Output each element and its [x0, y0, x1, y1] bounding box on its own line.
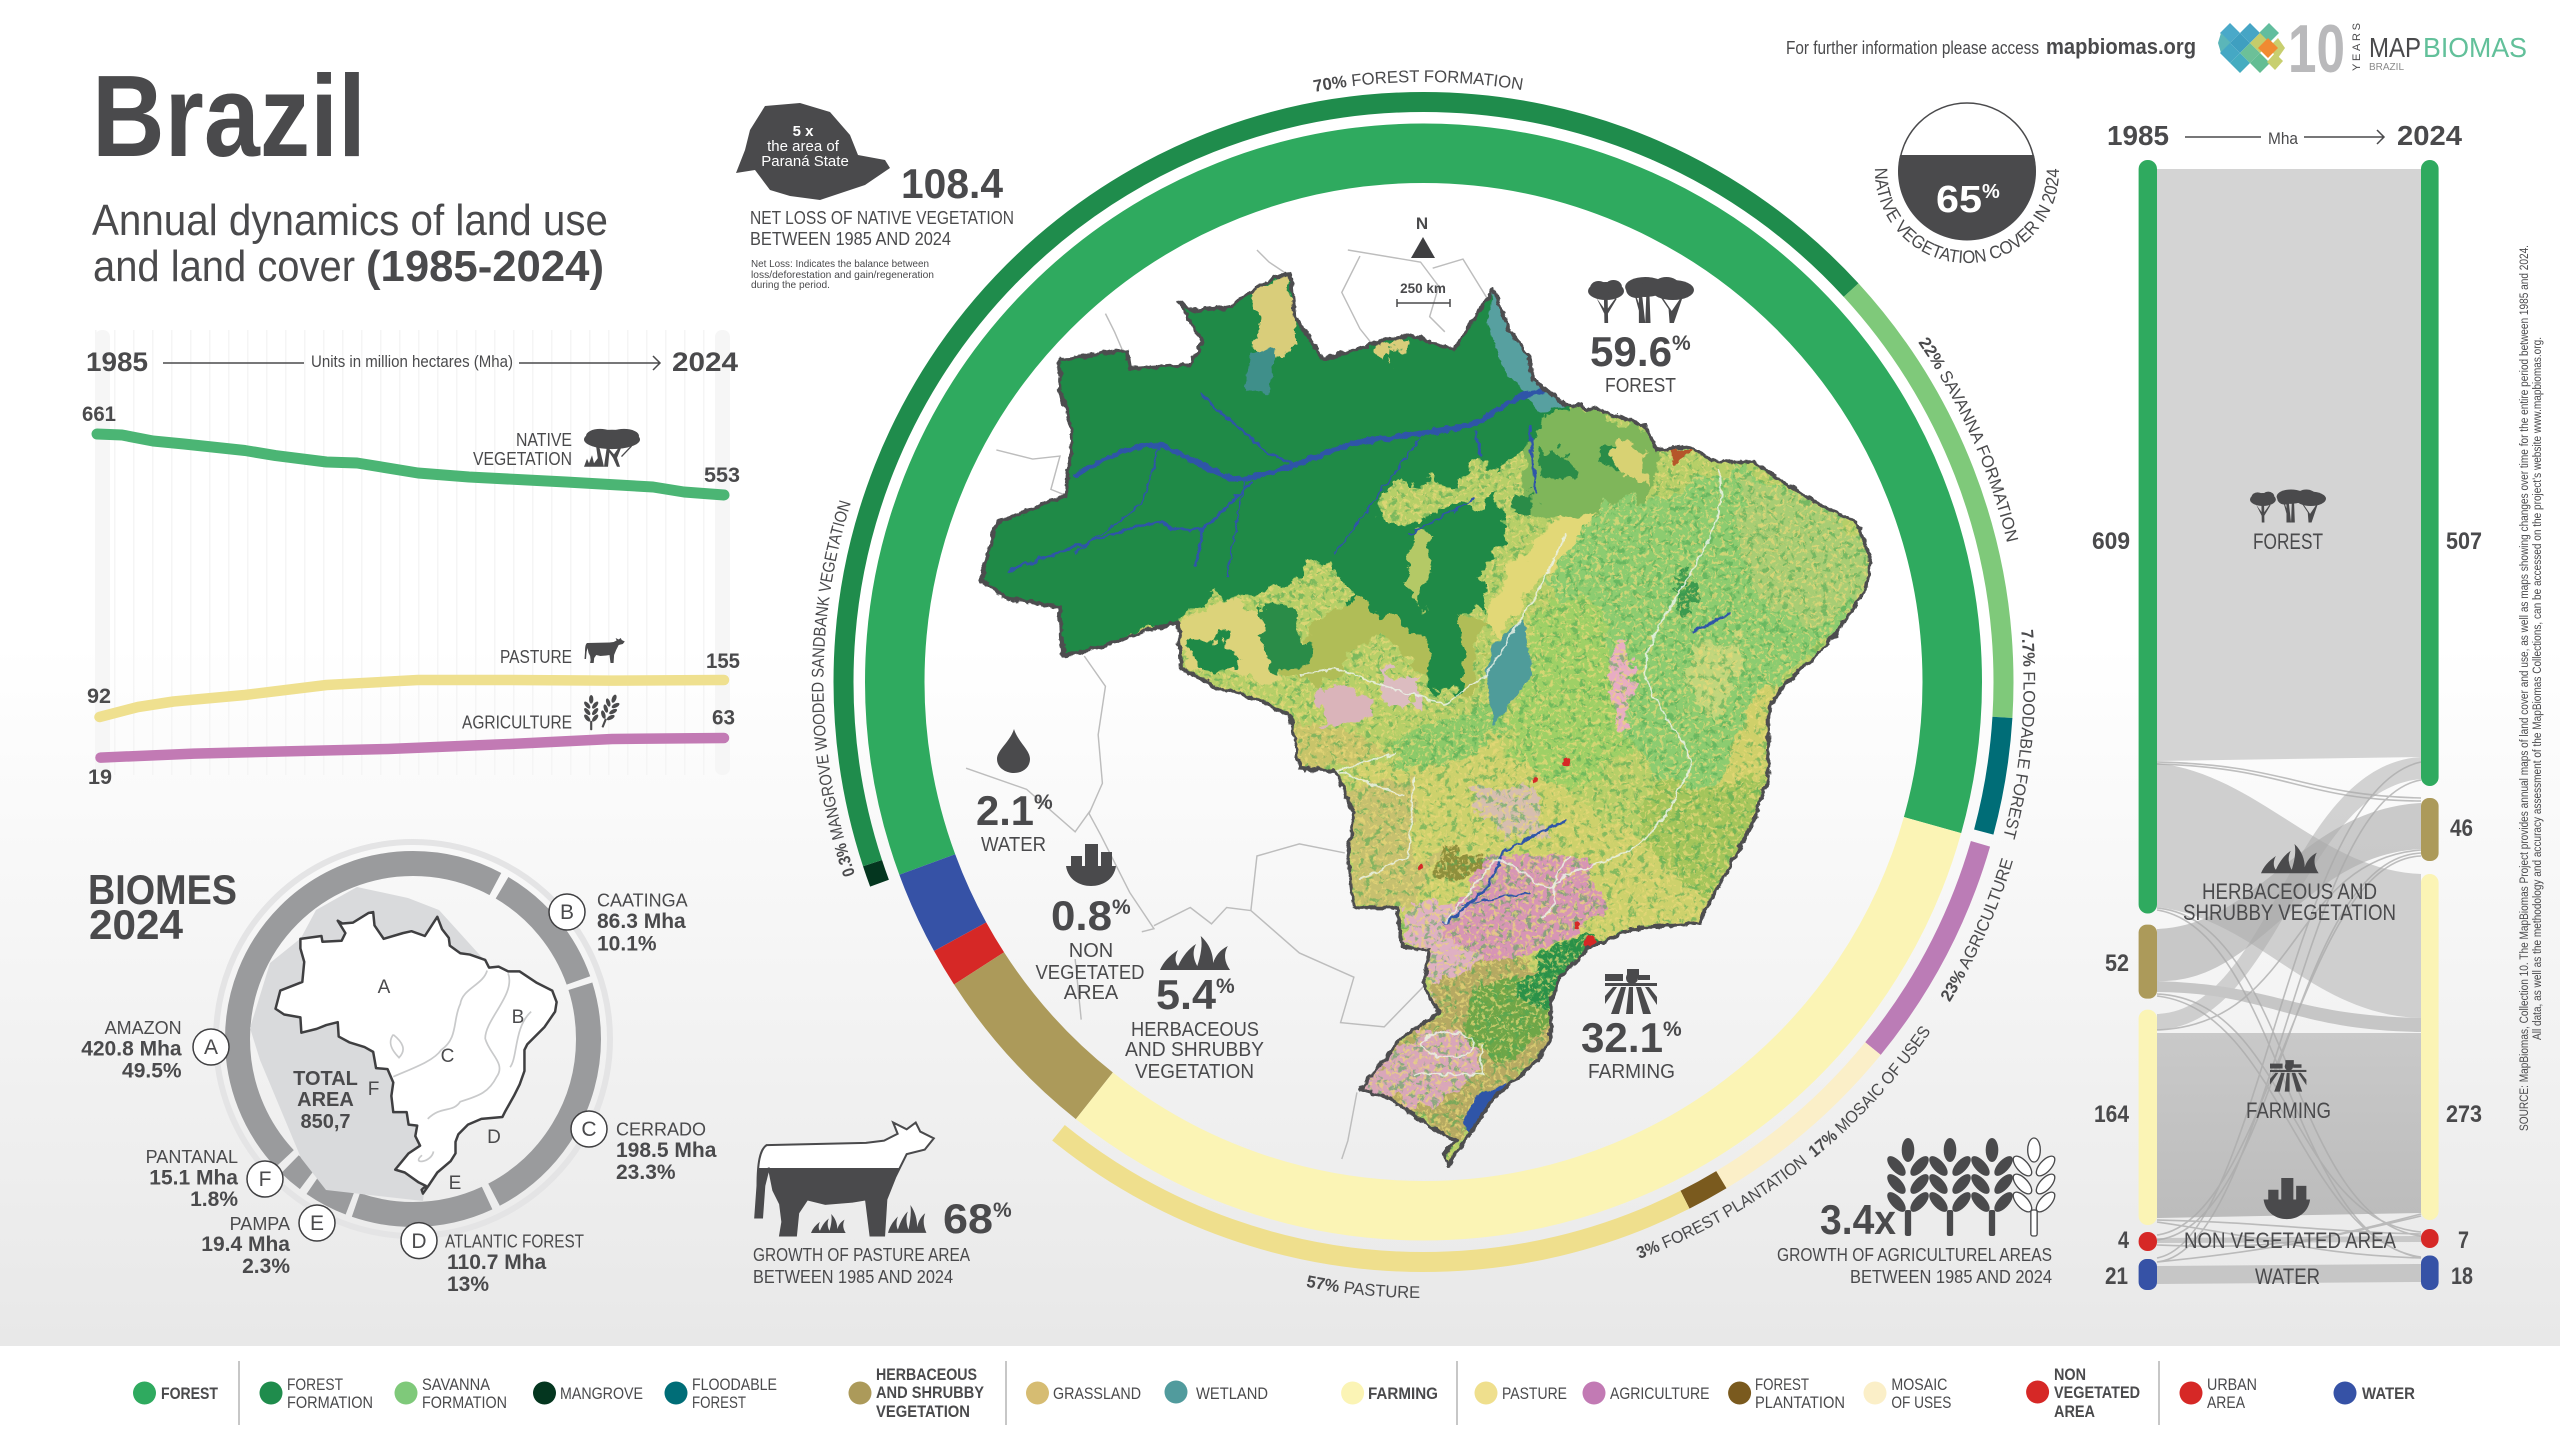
source note: SOURCE: MapBiomas, Collection 10. The MapBiomas Project provides annual maps of land cover and use, as well as maps showing changes over time for the entire period between 1985 and 2024.: [2519, 245, 2531, 1131]
total area: [293, 1068, 358, 1133]
chart axis header: 2024: [672, 347, 738, 377]
sankey header: 2024: [2397, 120, 2462, 151]
stat: herbaceous: 5.4: [1156, 971, 1217, 1018]
legend: mangrove: [533, 1382, 643, 1404]
biome label: Pampa: 19.4 Mha: [201, 1233, 290, 1256]
sankey values: 507: [2446, 528, 2482, 555]
ring labels: 70% FOREST FORMATION: [1313, 70, 1523, 92]
biome label: Amazon: AMAZON: [105, 1018, 182, 1038]
icon: water drop: [997, 729, 1030, 773]
net loss note: Net Loss: Indicates the balance between: [751, 259, 929, 270]
biome label: Cerrado: 23.3%: [616, 1161, 676, 1184]
gauge: native vegetation 65%: [1874, 102, 2060, 264]
biomes heading: BIOMES: [88, 866, 237, 913]
ring labels: 3% FOREST PLANTATION: [1636, 1154, 1808, 1258]
panel: annual line chart: [82, 330, 740, 789]
map letters: B: [512, 1007, 524, 1028]
biome label: Pantanal: 15.1 Mha: [149, 1166, 238, 1190]
icon: wheat stalks: [1884, 1138, 2058, 1236]
logo: MapBiomas 10 years: MAP: [2369, 32, 2421, 63]
biome marker letters: D: [411, 1230, 427, 1253]
biome marker letters: E: [310, 1212, 324, 1235]
sankey labels: FARMING: [2246, 1098, 2331, 1123]
net loss note: during the period.: [751, 280, 830, 291]
legend: mangrove: MANGROVE: [560, 1385, 643, 1403]
legend: floodable forest: FLOODABLE: [692, 1376, 777, 1394]
callout: pasture growth: GROWTH OF PASTURE AREA: [753, 1245, 970, 1265]
stat: water: %: [1034, 791, 1053, 814]
chart line labels: [462, 430, 572, 732]
biome marker letters: C: [581, 1118, 597, 1141]
legend: water: WATER: [2362, 1385, 2415, 1403]
callout: pasture growth: [753, 1123, 1012, 1287]
biome label: Cerrado: CERRADO: [616, 1120, 706, 1140]
biomes heading: 2024: [89, 901, 184, 948]
icon: north arrow: [1411, 214, 1435, 258]
stat: water: 2.1: [976, 787, 1034, 834]
sankey header: [2107, 120, 2462, 151]
chart line labels: AGRICULTURE: [462, 712, 572, 732]
sankey header: Mha: [2268, 129, 2298, 148]
legend: non vegetated area: NON: [2054, 1366, 2086, 1384]
stat: herbaceous: %: [1216, 975, 1235, 998]
legend: forest plantation: [1728, 1376, 1845, 1412]
stat: non vegetated area: [1036, 844, 1144, 1004]
chart values: 63: [712, 706, 735, 730]
biomes heading: [88, 866, 237, 948]
gauge: native vegetation 65%: NATIVE VEGETATION COVER IN 2024: [1874, 168, 2060, 264]
callout: agriculture growth: GROWTH OF AGRICULTUREL AREAS: [1777, 1245, 2052, 1265]
biome markers: [193, 894, 607, 1259]
biome label: Atlantic Forest: 110.7 Mha: [447, 1251, 547, 1274]
stat: non vegetated area: AREA: [1064, 982, 1119, 1004]
Parana text: 5 x: [793, 123, 814, 140]
gauge: native vegetation 65%: %: [1982, 181, 2000, 203]
stat: farming: 32.1: [1581, 1014, 1663, 1061]
Parana text: the area of: [767, 138, 840, 155]
legend: farming: FARMING: [1368, 1385, 1438, 1403]
net loss description: [750, 208, 1014, 249]
sankey values: 7: [2458, 1227, 2469, 1254]
legend: wetland: [1164, 1380, 1268, 1404]
subtitle: and land cover: [93, 242, 355, 291]
subtitle: Annual dynamics of land use: [92, 196, 608, 245]
logo: MapBiomas 10 years: [2218, 11, 2527, 87]
biome label: Atlantic Forest: 13%: [447, 1273, 489, 1296]
gauge: native vegetation 65%: 65: [1936, 179, 1982, 221]
sankey values: 273: [2446, 1101, 2482, 1128]
Parana text: Paraná State: [761, 153, 849, 170]
biome label: Pantanal: [146, 1147, 238, 1211]
sankey nodes 2024: [2421, 160, 2439, 1290]
chart line labels: NATIVE: [516, 430, 572, 450]
legend: forest: [133, 1382, 218, 1404]
net loss number: 108.4: [901, 160, 1004, 207]
sankey icons: [2250, 489, 2326, 1219]
biome label: Caatinga: CAATINGA: [597, 891, 688, 911]
ring labels: 22% SAVANNA FORMATION: [1918, 338, 2018, 542]
biome label: Pampa: [201, 1214, 290, 1278]
biome ring: [216, 842, 610, 1236]
logo: MapBiomas 10 years: BIOMAS: [2423, 32, 2527, 63]
chart axis header: [86, 347, 738, 377]
title: Brazil: [92, 51, 366, 181]
sankey values: 52: [2105, 950, 2129, 977]
stat: farming: [1581, 969, 1682, 1083]
stat: non vegetated area: VEGETATED: [1036, 962, 1144, 984]
legend: grassland: GRASSLAND: [1053, 1385, 1141, 1403]
icon: farm: [1605, 969, 1657, 1014]
biome marker letters: F: [259, 1168, 271, 1191]
legend: herbaceous and shrubby: [848, 1366, 984, 1421]
biome label: Atlantic Forest: [445, 1232, 584, 1296]
sankey labels: [2183, 529, 2396, 1289]
icon: cow: [585, 638, 625, 663]
total area: TOTAL: [293, 1068, 358, 1090]
map letters: C: [441, 1046, 454, 1067]
callout: pasture growth: %: [993, 1199, 1012, 1222]
net loss note: [751, 259, 934, 291]
legend: forest: FOREST: [161, 1385, 218, 1403]
chart line labels: VEGETATION: [473, 449, 572, 469]
chart values: 553: [704, 464, 740, 487]
biome label: Amazon: 49.5%: [122, 1060, 182, 1082]
subtitle: [92, 196, 608, 291]
icon: wheat: [583, 692, 623, 731]
biome label: Cerrado: 198.5 Mha: [616, 1139, 717, 1162]
sankey values: 46: [2450, 815, 2473, 842]
ring labels: 23% AGRICULTURE: [1941, 858, 2013, 1002]
callout: net loss: [736, 103, 1014, 291]
line: agriculture: [100, 738, 724, 758]
legend: mosaic of uses: [1864, 1376, 1951, 1412]
legend: herbaceous and shrubby: VEGETATION: [876, 1403, 970, 1421]
icon: grass tufts: [811, 1205, 926, 1233]
biome label: Atlantic Forest: ATLANTIC FOREST: [445, 1232, 584, 1252]
legend: wetland: WETLAND: [1196, 1385, 1268, 1403]
ring labels: [812, 70, 2036, 1298]
ring labels: 7.7% FLOODABLE FOREST: [2004, 630, 2036, 840]
biome marker letters: A: [204, 1036, 218, 1059]
legend: mosaic of uses: OF USES: [1891, 1394, 1951, 1412]
callout: pasture growth: 68: [943, 1195, 993, 1242]
sankey header: 1985: [2107, 120, 2169, 151]
legend: forest plantation: PLANTATION: [1755, 1394, 1845, 1412]
legend: grassland: [1026, 1382, 1141, 1404]
sankey values: 21: [2105, 1263, 2128, 1290]
legend: urban area: [2180, 1376, 2257, 1412]
stat: farming: %: [1663, 1018, 1682, 1041]
map scale bar: 250 km: [1400, 281, 1446, 296]
ring labels: 17% MOSAIC OF USES: [1809, 1026, 1930, 1158]
biome label: Amazon: [81, 1018, 182, 1082]
stat: farming: FARMING: [1588, 1061, 1675, 1083]
legend: savanna formation: FORMATION: [422, 1394, 507, 1412]
chart axis header: 1985: [86, 347, 148, 377]
stat: forest: [1588, 277, 1694, 397]
sankey nodes 1985: [2139, 160, 2157, 1290]
ring labels: 57% PASTURE: [1306, 1275, 1420, 1298]
legend: agriculture: [1582, 1382, 1710, 1404]
legend: farming: [1341, 1382, 1438, 1404]
header: further information: For further information please access: [1786, 38, 2039, 58]
panel: biomes 2024: [81, 842, 717, 1296]
icon: native tree: [584, 429, 640, 467]
chart values: 661: [82, 403, 116, 426]
legend: forest formation: [260, 1376, 373, 1412]
map letters: [368, 977, 524, 1194]
logo: MapBiomas 10 years: 10: [2288, 11, 2345, 87]
line: pasture: [100, 680, 724, 717]
map letters: E: [449, 1173, 461, 1194]
stat: forest: 59.6: [1590, 328, 1672, 375]
legend dividers: [239, 1361, 2159, 1425]
legend: non vegetated area: AREA: [2054, 1403, 2095, 1421]
map scale bar: [1397, 281, 1450, 307]
logo: MapBiomas 10 years: BRAZIL: [2369, 62, 2404, 73]
line: native vegetation: [97, 434, 724, 495]
legend: herbaceous and shrubby: AND SHRUBBY: [876, 1384, 984, 1402]
legend: savanna formation: SAVANNA: [422, 1376, 490, 1394]
legend: non vegetated area: [2026, 1366, 2140, 1421]
legend: savanna formation: [394, 1376, 507, 1412]
legend: floodable forest: [664, 1376, 777, 1412]
callout: pasture growth: BETWEEN 1985 AND 2024: [753, 1267, 953, 1287]
legend: mosaic of uses: MOSAIC: [1891, 1376, 1947, 1394]
sankey values: [2092, 528, 2482, 1290]
legend: herbaceous and shrubby: HERBACEOUS: [876, 1366, 977, 1384]
header: further information: mapbiomas.org: [2046, 34, 2196, 59]
biome label: Pantanal: PANTANAL: [146, 1147, 238, 1167]
sankey values: 609: [2092, 528, 2130, 555]
Parana text: [761, 123, 849, 170]
icon: buildings: [1066, 844, 1116, 886]
total area: AREA: [297, 1089, 354, 1111]
legend: agriculture: AGRICULTURE: [1610, 1385, 1710, 1403]
sankey labels: SHRUBBY VEGETATION: [2183, 900, 2396, 925]
biome label: Caatinga: 10.1%: [597, 932, 657, 956]
sankey values: 4: [2118, 1227, 2130, 1254]
biome marker letters: B: [560, 901, 574, 924]
sankey labels: FOREST: [2253, 529, 2323, 554]
stat: forest: %: [1672, 332, 1691, 355]
stat: herbaceous: VEGETATION: [1135, 1061, 1254, 1083]
outer ring: sub-classes: [844, 102, 2004, 1262]
sankey flows: [2157, 169, 2421, 1284]
legend: urban area: AREA: [2207, 1394, 2245, 1412]
ring labels: 0.3% MANGROVE WOODED SANDBANK VEGETATION: [812, 500, 854, 876]
header: further information: [1786, 34, 2196, 59]
source note: All data, as well as the methodology and accuracy assessment of the MapBiomas Collections, can be accessed on the project's website www.mapbiomas.org.: [2532, 337, 2544, 1040]
legend: urban area: URBAN: [2207, 1376, 2257, 1394]
stat: non vegetated area: %: [1112, 896, 1131, 919]
stat: non vegetated area: NON: [1069, 940, 1113, 962]
legend: water: [2334, 1382, 2415, 1404]
sankey labels: NON VEGETATED AREA: [2184, 1228, 2396, 1253]
biome label: Caatinga: 86.3 Mha: [597, 910, 686, 933]
chart axis header: Units in million hectares (Mha): [311, 352, 513, 371]
inner ring: classes: [895, 153, 1952, 1211]
sankey labels: WATER: [2255, 1264, 2320, 1289]
chart values: 155: [706, 650, 740, 673]
stat: herbaceous: HERBACEOUS: [1131, 1019, 1259, 1041]
icon: trees: [1588, 277, 1694, 323]
legend: forest plantation: FOREST: [1755, 1376, 1809, 1394]
biome label: Cerrado: [616, 1120, 717, 1184]
legend: pasture: [1474, 1382, 1567, 1404]
map letters: A: [378, 977, 391, 998]
sankey values: 164: [2094, 1101, 2130, 1128]
Brazil biome map: [276, 912, 557, 1194]
panel: sankey transitions: [2092, 120, 2482, 1290]
stat: non vegetated area: 0.8: [1051, 892, 1112, 939]
logo: MapBiomas 10 years: YEARS: [2351, 23, 2363, 71]
callout: agriculture growth: [1777, 1138, 2058, 1287]
callout: agriculture growth: BETWEEN 1985 AND 2024: [1850, 1267, 2052, 1287]
icon: Parana state: [736, 103, 890, 200]
map: Brazil land cover: [978, 271, 1872, 1168]
legend: pasture: PASTURE: [1502, 1385, 1567, 1403]
total area: 850,7: [300, 1111, 351, 1133]
biome marker letters: [204, 901, 597, 1253]
chart values: 92: [87, 685, 111, 708]
legend: forest formation: FORMATION: [287, 1394, 373, 1412]
net loss description: NET LOSS OF NATIVE VEGETATION: [750, 208, 1014, 228]
biome label: Pampa: 2.3%: [242, 1255, 290, 1278]
biome label: Amazon: 420.8 Mha: [81, 1038, 182, 1060]
icon: north arrow: N: [1416, 214, 1428, 233]
net loss description: BETWEEN 1985 AND 2024: [750, 229, 951, 249]
biome label: Caatinga: [597, 891, 688, 956]
legend: non vegetated area: VEGETATED: [2054, 1384, 2140, 1402]
map letters: F: [368, 1079, 379, 1100]
map letters: D: [487, 1127, 501, 1148]
stat: water: [976, 729, 1053, 856]
net loss note: loss/deforestation and gain/regeneration: [751, 270, 934, 281]
legend: forest formation: FOREST: [287, 1376, 343, 1394]
map: neighbouring borders: [966, 250, 1487, 1159]
sankey labels: HERBACEOUS AND: [2202, 879, 2377, 904]
chart line labels: PASTURE: [500, 647, 572, 667]
subtitle: (1985-2024): [366, 242, 604, 291]
legend: [133, 1361, 2415, 1425]
biome label: Pantanal: 1.8%: [190, 1188, 238, 1211]
icon: grass: [1160, 936, 1230, 970]
stat: forest: FOREST: [1605, 375, 1676, 397]
chart values: [82, 403, 740, 789]
icon: half-filled cow: [755, 1123, 934, 1236]
chart values: 19: [88, 766, 112, 789]
stat: herbaceous: [1125, 936, 1264, 1083]
stat: herbaceous: AND SHRUBBY: [1125, 1039, 1264, 1061]
callout: agriculture growth: 3.4x: [1820, 1196, 1897, 1243]
biome label: Pampa: PAMPA: [230, 1214, 290, 1234]
South America silhouette: [250, 887, 487, 1201]
legend: floodable forest: FOREST: [692, 1394, 746, 1412]
source note: [2519, 245, 2544, 1131]
sankey values: 18: [2451, 1263, 2473, 1290]
stat: water: WATER: [981, 834, 1046, 856]
chart: main donut rings: [844, 102, 2004, 1262]
